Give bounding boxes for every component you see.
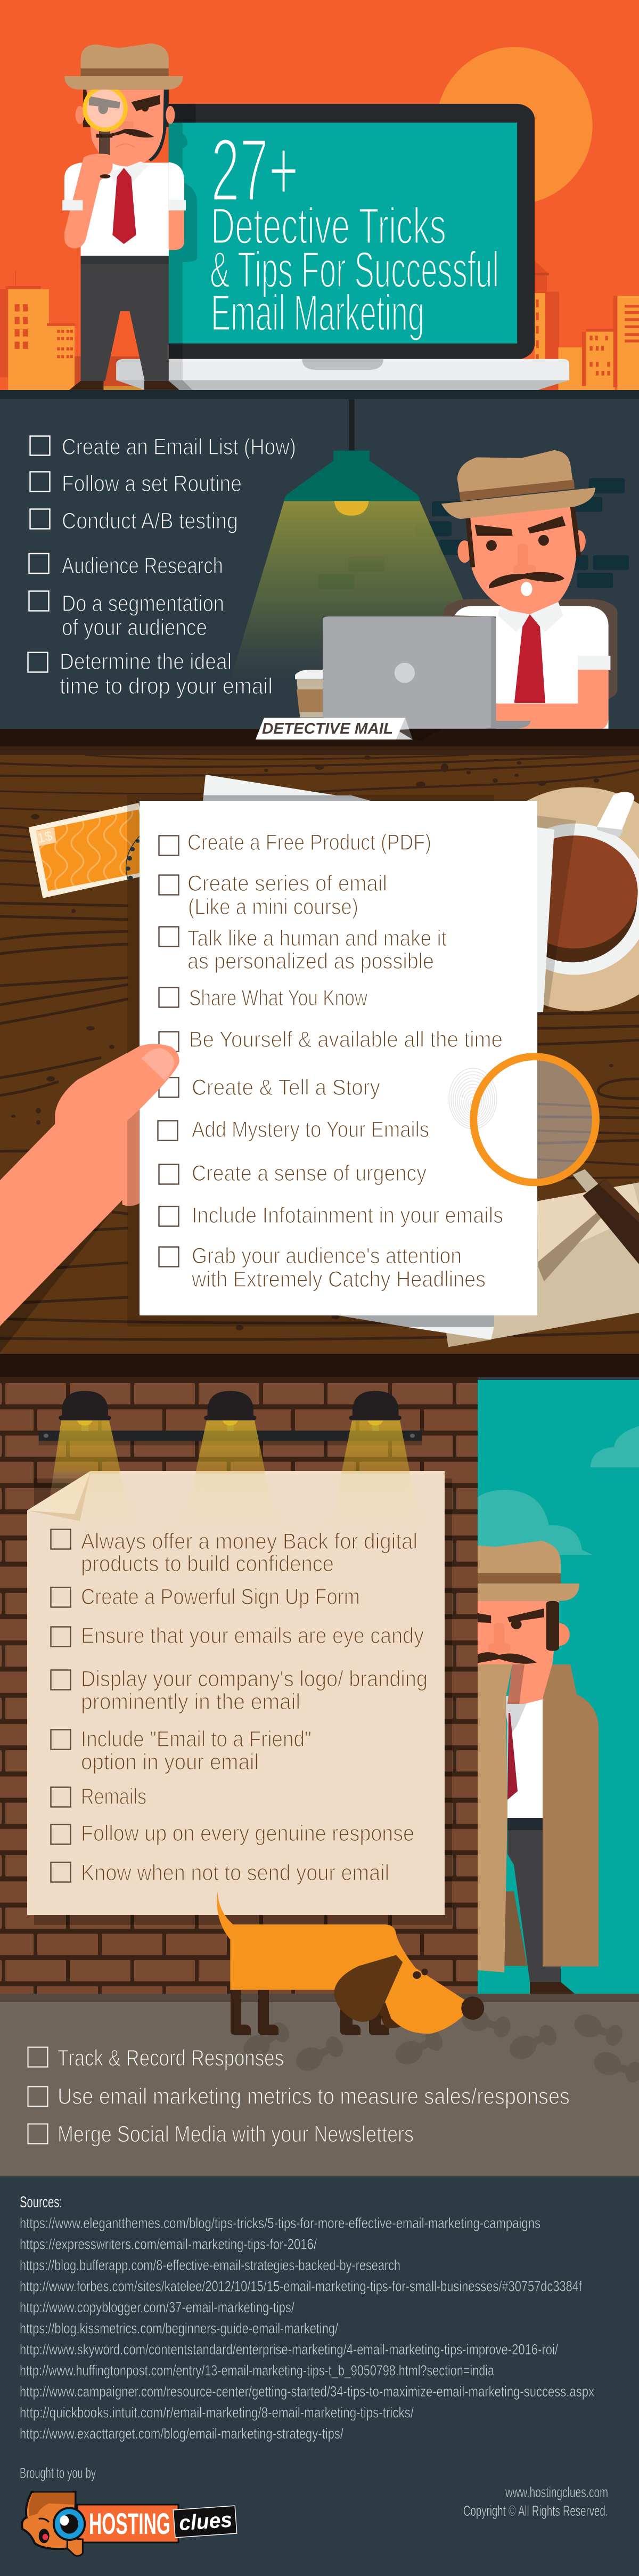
panel: cream paper note [27,1471,445,1915]
hat [81,43,169,76]
envelope [338,1182,639,1347]
collar [108,161,149,182]
item: eye candy: Ensure that your emails are eye candy [81,1623,424,1648]
lamp bar [39,1441,422,1445]
nose [494,1623,504,1647]
trench coat [478,1664,599,1994]
item: tell a story: Create & Tell a Story [192,1075,380,1100]
item: catchy headlines [159,1243,486,1291]
wood specks [11,755,613,1336]
item: infotainment: Include Infotainment in your emails [192,1202,503,1228]
item: series of email [159,871,387,919]
clouds [478,1426,639,1555]
item: ideal time: Determine the ideal [60,649,232,675]
magnifying glass lens [473,1057,596,1182]
footprints [239,2005,639,2085]
coffee cup and saucer [469,787,639,1011]
footprint [506,2021,560,2063]
sources list: http://www.exacttarget.com/blog/email-marketing-strategy-tips/ [20,2425,343,2442]
right arm [169,210,184,250]
eye [511,1620,522,1629]
hat band [478,1573,561,1583]
hair and ears [83,90,169,127]
item: create an email list: Create an Email List (How) [62,434,296,460]
arm and hand [64,153,113,248]
bulbs [77,1420,93,1426]
checklist: section one [28,434,296,699]
coffee cup [295,670,323,718]
trousers [507,1830,561,1982]
item: money back: products to build confidence [81,1551,334,1576]
sources list: http://www.copyblogger.com/37-email-marketing-tips/ [20,2299,294,2315]
footprint [392,2027,446,2069]
shirt [454,606,609,729]
item: remails: Remails [81,1784,146,1809]
detective with magnifying glass [62,43,186,390]
face [468,507,577,614]
item: company logo: Display your company's logo/ branding [81,1666,428,1691]
item: follow up: Follow up on every genuine response [81,1821,414,1846]
item: company logo [51,1666,428,1714]
brows [475,525,513,536]
face [478,1601,559,1666]
trousers [81,265,169,381]
sources list [20,2215,594,2442]
section background: orange header [0,0,639,390]
brow and eye [131,95,160,111]
pavement [0,1994,639,2176]
belt [81,256,169,265]
ears [457,540,471,563]
checklist: section two [158,830,503,1291]
item: money back [51,1529,417,1576]
footprint [591,2049,639,2085]
item: conduct A/B testing: Conduct A/B testing [62,508,238,534]
dog body and head [217,1891,484,2034]
item: sign up form: Create a Powerful Sign Up Form [81,1584,360,1609]
item: segmentation [29,591,224,640]
logo tag: clues [178,2508,233,2535]
laptop [116,104,569,390]
item: catchy headlines: with Extremely Catchy Headlines [191,1266,486,1291]
sources list: https://blog.kissmetrics.com/beginners-guide-email-marketing/ [20,2320,338,2337]
item: catchy headlines: Grab your audience's attention [192,1243,462,1268]
item: email to a friend: option in your email [81,1749,259,1774]
lens [85,87,126,129]
logo: Hosting Clues [22,2492,237,2556]
wall bricks and lamp [230,399,629,680]
lamp domes [59,1391,402,1420]
shirt cuffs [169,200,186,210]
item: sense of urgency: Create a sense of urgency [192,1160,427,1185]
footprint [239,2018,293,2063]
lamp stems [81,1424,88,1431]
desk name plate [256,718,442,741]
item: series of email: Create series of email [187,871,387,896]
footprint [292,2033,347,2075]
logo word HOSTING: HOSTING [89,2507,170,2540]
nose [118,121,134,129]
sideburns [468,507,579,567]
belt [507,1818,543,1830]
desk name plate: DETECTIVE MAIL [262,720,393,737]
checklist: section three [51,1529,428,1885]
dog nose [461,1996,484,2020]
panel: wooden desk [0,746,639,1354]
shirt [507,1696,543,1818]
detective behind wall [478,1541,579,1666]
panel: brick wall [0,1377,478,1994]
mouth [116,144,135,147]
footprint [459,2005,513,2040]
sources list: https://expresswriters.com/email-marketing-tips-for-2016/ [20,2236,317,2253]
dog eye [413,1971,421,1979]
bulb [334,501,369,516]
coat lining [504,1891,527,1966]
moustache [96,129,154,137]
mouth [521,582,532,596]
other eye [421,1969,428,1975]
shirt [81,162,169,256]
eyes [486,540,497,551]
item: ideal time: time to drop your email [60,673,273,699]
panel: footer [0,2176,639,2576]
hand [0,1044,179,1353]
tie [112,168,136,244]
item: segmentation: of your audience [62,615,207,640]
item: email to a friend [51,1726,312,1774]
nose [518,543,528,571]
sources list: http://quickbooks.intuit.com/r/email-marketing/8-email-marketing-tips-tricks/ [20,2404,414,2421]
item: add mystery: Add Mystery to Your Emails [192,1117,429,1142]
title: 27+ [211,120,299,220]
item: share what you know: Share What You Know [189,985,368,1010]
title [210,120,499,342]
tie [514,614,545,703]
tie [507,1713,518,1800]
title: Detective Tricks [211,198,446,255]
item: segmentation: Do a segmentation [62,591,224,616]
item: talk like a human [159,925,447,973]
lamp shade [284,451,420,501]
dog legs [231,1990,389,2035]
panel: paper note shadow [34,1478,452,1925]
laptop at desk [323,616,530,729]
stamp price: 1$ [36,828,54,846]
footprint [571,2011,625,2049]
item: audience research: Audience Research [62,553,223,579]
sources heading: Sources: [20,2193,62,2211]
panel: teal sky [478,1380,639,1994]
left coat [478,1664,512,1972]
panel: office background [0,399,639,729]
moustache [489,572,564,589]
dark floor band between desk and alley [0,1354,639,1377]
desk top band [0,729,639,746]
item: series of email: (Like a mini course) [188,894,358,919]
sources list: http://www.huffingtonpost.com/entry/13-email-marketing-tips-t_b_9050798.html?section=india [20,2362,494,2378]
item: know when not to send: Know when not to send your email [81,1860,389,1885]
checklist: section four [28,2045,570,2147]
item: email to a friend: Include "Email to a Friend" [81,1726,312,1751]
item: be yourself: Be Yourself & available all the time [189,1027,503,1052]
ear [548,1623,570,1646]
item: money back: Always offer a money Back for digital [81,1529,417,1554]
shoes [69,381,179,390]
lamp light beams [45,1420,421,1529]
magnifier handle [99,129,110,155]
city skyline and sun [0,47,639,390]
dog [217,1891,484,2035]
item: social media: Merge Social Media with your Newsletters [58,2122,414,2147]
item: track responses: Track & Record Responses [58,2045,284,2071]
thumb over paper [122,1044,179,1125]
item: free product: Create a Free Product (PDF) [187,830,431,855]
dog ear [334,1955,403,2022]
far ear [379,2003,413,2028]
sheets under the checklist [203,775,554,1012]
detective at desk [441,450,617,729]
face [86,90,164,167]
wall lamps [39,1391,422,1445]
paper shadow [127,795,494,1327]
lamp cord [349,399,355,451]
item: follow a set routine: Follow a set Routine [62,471,242,497]
shoe [530,1982,575,1994]
item: metrics: Use email marketing metrics to measure sales/responses [58,2084,570,2109]
sources list: https://blog.bufferapp.com/8-effective-email-strategies-backed-by-research [20,2257,400,2273]
right coat [543,1664,599,1966]
item: talk like a human: Talk like a human and make it [187,925,447,950]
website and copyright [463,2484,608,2519]
hat brim [478,1583,579,1601]
brought to you by: Brought to you by [20,2465,96,2481]
item: remails [51,1784,146,1809]
item: ideal time [28,649,273,699]
fingerprint [449,1068,497,1129]
item: audience research [29,553,223,579]
item: company logo: prominently in the email [81,1689,300,1714]
dark floor band [0,390,639,400]
neck and chin [509,1664,552,1704]
collar [498,602,563,632]
logo banner [77,2505,178,2542]
sideburn [546,1601,559,1651]
moustache [478,1652,537,1664]
wood grain [0,754,639,1339]
panel: white checklist paper [140,801,537,1315]
item: talk like a human: as personalized as possible [187,948,434,973]
title: Email Marketing [211,285,424,342]
light beam [230,501,465,680]
brows [507,1608,544,1622]
chair [444,599,617,703]
hat crown [478,1541,561,1573]
logo mascot [22,2492,85,2556]
postage stamp [29,803,140,898]
arm [496,670,609,729]
hat [457,450,574,492]
magnifying glass handle [572,1169,639,1264]
